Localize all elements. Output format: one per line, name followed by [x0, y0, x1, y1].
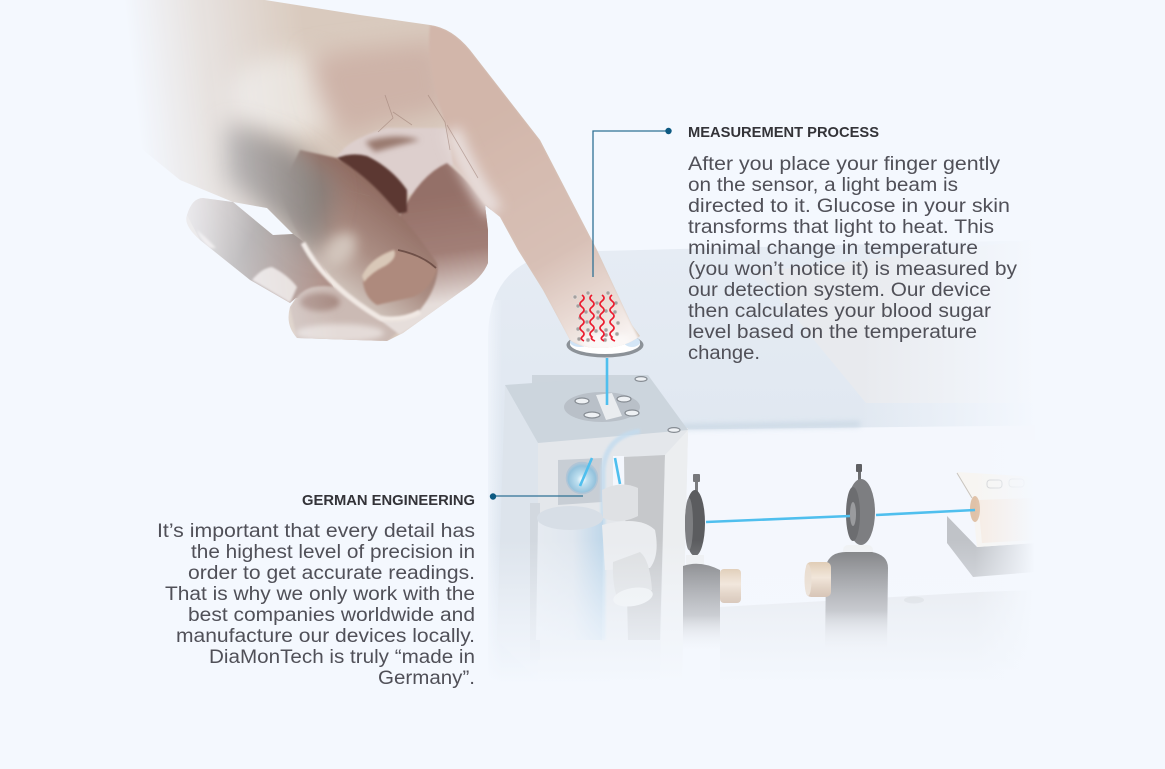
text block: german engineering: order to get accurate readings.: [188, 563, 475, 584]
pointing finger: [429, 25, 642, 352]
thumb pale patch: [321, 227, 362, 268]
block top face: [505, 375, 688, 443]
fingertip heat pattern: [573, 291, 620, 342]
plate holes: [904, 596, 924, 604]
text block: measurement process: on the sensor, a light beam is: [688, 175, 958, 196]
mirror sphere: [566, 462, 598, 494]
interior window: [610, 424, 1165, 769]
housing angled facet: [758, 240, 1035, 403]
hand base: [144, 0, 640, 348]
finger left pale edge: [452, 130, 495, 212]
block back edge: [532, 375, 655, 390]
knuckle streak: [365, 136, 420, 152]
nail lunula: [362, 250, 395, 282]
text block: measurement process: our detection system. Our device: [688, 280, 991, 301]
text block: measurement process: [688, 154, 1018, 364]
ring finger nail highlight: [199, 233, 215, 248]
heading: german engineering: GERMAN ENGINEERING: [302, 492, 475, 509]
mount screws: [575, 377, 680, 432]
thumb pale edge: [303, 243, 420, 319]
cross fitting: [602, 484, 657, 609]
heading: measurement process: MEASUREMENT PROCESS: [688, 124, 879, 141]
grey thumb shadow: [225, 125, 335, 255]
text block: measurement process: directed to it. Glucose in your skin: [688, 196, 1010, 217]
ring finger: [196, 198, 334, 303]
text block: measurement process: (you won’t notice it) is measured by: [688, 259, 1018, 280]
glass curve glow: [603, 431, 640, 640]
white opening: [613, 456, 624, 486]
sensor ring: [566, 332, 644, 358]
text block: german engineering: It’s important that every detail has: [157, 521, 475, 542]
right bracket: [947, 472, 1037, 577]
right pillar: [660, 430, 688, 680]
block front face: [538, 428, 688, 680]
block left face: [497, 385, 538, 680]
device housing panel: [488, 240, 1040, 760]
sensor dots: [573, 291, 620, 342]
sensor block: [497, 375, 688, 680]
palm crevice: [337, 154, 407, 215]
sensor chip: [596, 393, 622, 420]
text block: measurement process: level based on the temperature: [688, 322, 977, 343]
optics mount left: [683, 474, 741, 650]
text block: measurement process: After you place your finger gently: [688, 154, 1001, 175]
device illustration: [470, 230, 1165, 769]
text block: german engineering: best companies worldwide and: [188, 605, 475, 626]
light beams: [580, 358, 975, 522]
connector: german engineering: [490, 493, 583, 500]
base plate: [720, 590, 1035, 690]
text block: german engineering: Germany”.: [378, 668, 475, 689]
curled finger: [380, 163, 495, 335]
heat waves: [580, 295, 615, 341]
text block: german engineering: [157, 521, 475, 689]
thumb: [294, 150, 438, 318]
sensor mount disc: [564, 392, 640, 422]
text block: measurement process: transforms that light to heat. This: [688, 217, 994, 238]
knuckle of middle finger: [337, 128, 455, 195]
ring finger fold: [252, 267, 297, 303]
skin creases: [378, 94, 478, 178]
left column recess: [530, 503, 540, 660]
nail fold line: [398, 250, 436, 268]
bottom fade: [470, 540, 1165, 685]
large cylinder: [536, 506, 603, 640]
text block: german engineering: DiaMonTech is truly “made in: [209, 647, 475, 668]
lower finger shade: [300, 293, 340, 311]
text block: measurement process: change.: [688, 343, 760, 364]
text block: german engineering: That is why we only work with the: [165, 584, 475, 605]
right fade: [975, 440, 1035, 700]
lower curled finger: [290, 286, 400, 342]
upper inner plate: [558, 458, 602, 505]
text block: german engineering: the highest level of precision in: [191, 542, 475, 563]
lower finger pale: [296, 324, 384, 342]
back of hand pale patch: [230, 55, 350, 135]
text block: german engineering: manufacture our devices locally.: [176, 626, 475, 647]
text block: measurement process: then calculates your blood sugar: [688, 301, 992, 322]
hand photo: [144, 0, 640, 348]
optics mount right: [804, 464, 888, 650]
housing right fade: [860, 235, 1038, 435]
right compartment: [624, 455, 665, 640]
fingertip glow: [580, 334, 628, 348]
thumbnail: [363, 250, 437, 305]
text block: measurement process: minimal change in temperature: [688, 238, 978, 259]
housing lit edge: [680, 424, 860, 427]
connector: measurement process: [593, 128, 672, 277]
housing left light band: [488, 300, 502, 710]
knuckle rose shade: [310, 40, 450, 140]
